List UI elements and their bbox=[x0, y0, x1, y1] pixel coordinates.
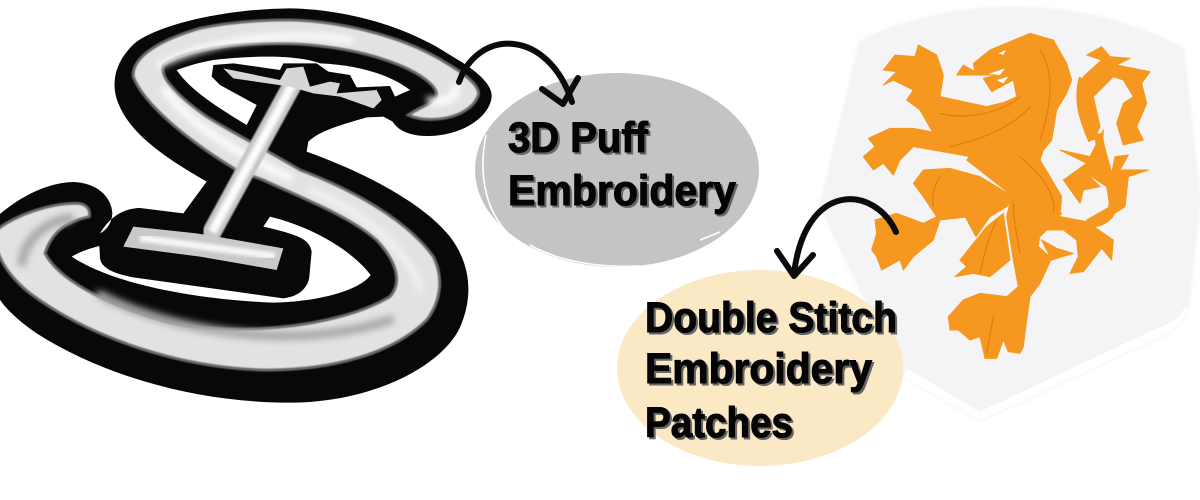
S black backing bbox=[0, 8, 492, 403]
leg tassel bbox=[955, 213, 1010, 277]
back leg bbox=[872, 168, 1013, 270]
label: Double Stitch Embroidery Patches: Patches bbox=[647, 401, 795, 449]
label: Double Stitch Embroidery Patches: Embroidery bbox=[645, 345, 872, 393]
arrow to 3D Puff bbox=[459, 44, 578, 104]
lion eye and mouth bbox=[988, 50, 1008, 83]
brush streaks bbox=[483, 72, 720, 266]
S shaded centre bbox=[22, 36, 456, 336]
raised paw bbox=[883, 45, 1013, 140]
middle arm bbox=[863, 110, 1013, 175]
ellipse badge: 3D Puff bbox=[475, 72, 759, 267]
lion stitching detail bbox=[933, 50, 1054, 353]
S stem and serifs bbox=[123, 67, 382, 270]
label: 3D Puff Embroidery: Embroidery bbox=[510, 169, 738, 217]
label: 3D Puff Embroidery bbox=[508, 114, 738, 217]
label: Double Stitch Embroidery Patches: Patches bbox=[645, 399, 793, 447]
label: Double Stitch Embroidery Patches: Double Stitch bbox=[647, 296, 899, 344]
rear thigh bbox=[1047, 217, 1113, 273]
shield patch bbox=[820, 7, 1200, 421]
label: Double Stitch Embroidery Patches bbox=[645, 294, 899, 449]
lion emblem bbox=[863, 33, 1150, 358]
label: Double Stitch Embroidery Patches: Double Stitch bbox=[645, 294, 897, 342]
tail flourish bbox=[1078, 47, 1150, 145]
label: 3D Puff Embroidery: Embroidery bbox=[508, 167, 736, 215]
label: Double Stitch Embroidery Patches: Embroidery bbox=[647, 347, 874, 395]
S stitched band bbox=[0, 20, 478, 370]
label: 3D Puff Embroidery: 3D Puff bbox=[508, 114, 649, 162]
head and mane bbox=[957, 33, 1072, 237]
arrow to Double Stitch bbox=[777, 199, 896, 276]
standing leg bbox=[948, 187, 1062, 358]
puff S patch bbox=[0, 8, 492, 403]
ellipse badge: Double Stitch bbox=[617, 270, 903, 466]
label: 3D Puff Embroidery: 3D Puff bbox=[510, 116, 651, 164]
